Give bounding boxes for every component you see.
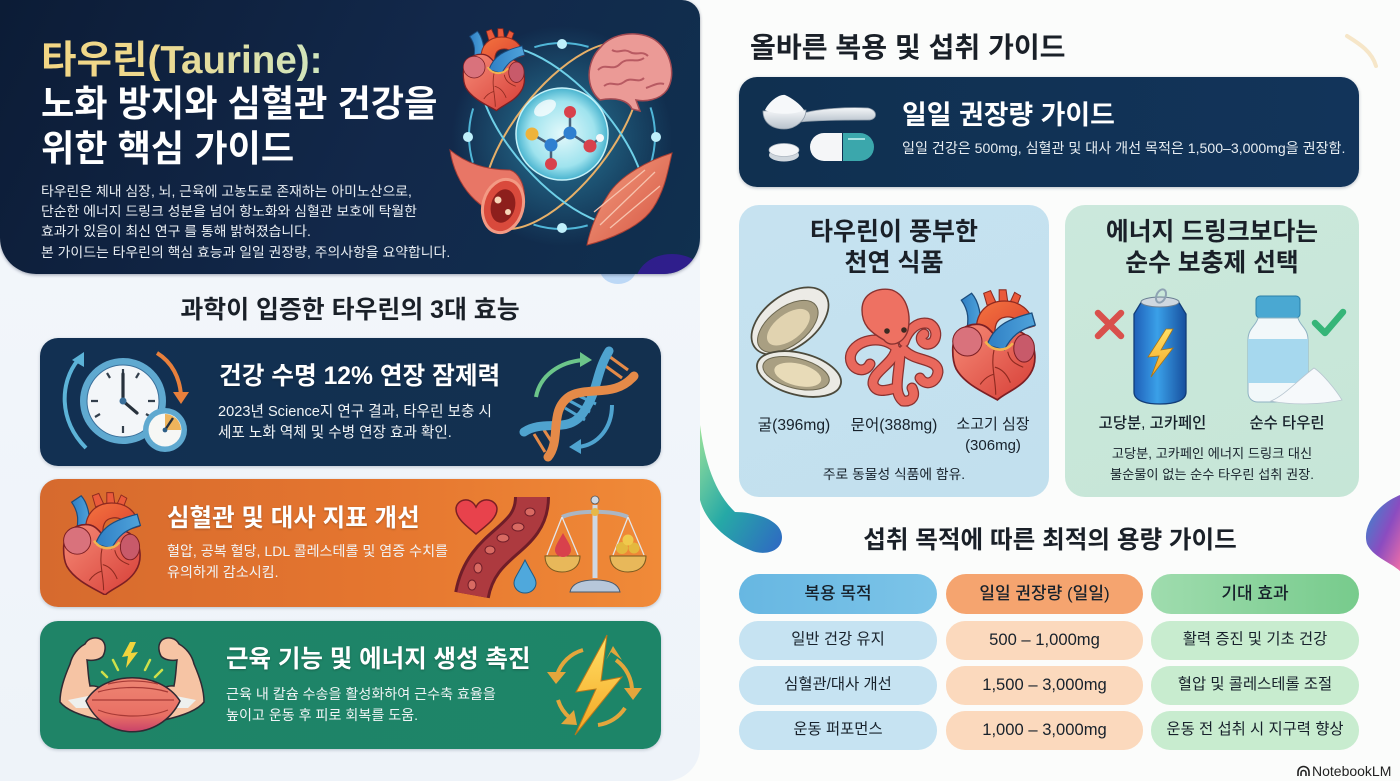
panel heading	[1106, 218, 1318, 277]
icon: DNA helix	[520, 346, 638, 462]
icon: red cross	[1094, 310, 1124, 340]
panel: natural foods	[739, 205, 1049, 497]
icon: vessel, heart, drop and scales	[454, 496, 646, 598]
icon: clock with arrows	[62, 351, 189, 452]
dose: general health: 500 – 1,000mg	[989, 630, 1100, 649]
icon: octopus	[844, 288, 944, 407]
effect: general health	[1151, 621, 1359, 660]
row: exercise: 운동 퍼포먼스	[793, 721, 883, 738]
card description	[167, 543, 448, 580]
dose: general health	[946, 621, 1143, 660]
row: cardiovascular	[739, 666, 937, 705]
icon: oysters	[750, 286, 842, 398]
icon: notebook arcs	[1297, 766, 1310, 776]
blob: hero corner	[636, 254, 708, 310]
label: beef heart: (306mg)	[965, 436, 1021, 454]
effect: general health: 활력 증진 및 기초 건강	[1183, 631, 1327, 648]
card description: 높이고 운동 후 피로 회복를 도움.	[226, 706, 418, 722]
card title: 심혈관 및 대사 지표 개선	[167, 505, 420, 532]
label: beef heart: 소고기 심장	[956, 416, 1030, 433]
effect: exercise	[1151, 711, 1359, 750]
card title: 근육 기능 및 에너지 생성 촉진	[226, 646, 531, 673]
title: 타우린(Taurine):	[41, 39, 322, 82]
panel: daily dose	[739, 77, 1359, 187]
title: 노화 방지와 심혈관 건강을	[41, 83, 437, 124]
dose: exercise	[946, 711, 1143, 750]
recommendation note	[1110, 446, 1314, 482]
column header: daily dose: 일일 권장량 (일일)	[979, 584, 1110, 603]
icon: lightning bolt cycle	[547, 634, 642, 736]
blob: teal decoration	[700, 426, 782, 553]
card description: 유의하게 감소시킴.	[167, 564, 279, 580]
dose: exercise: 1,000 – 3,000mg	[982, 720, 1107, 739]
icon: pure taurine bottle	[1248, 296, 1342, 404]
card description	[226, 686, 496, 722]
icon: beef heart	[952, 289, 1036, 401]
icon: energy drink can	[1133, 288, 1187, 405]
label: beef heart	[956, 416, 1030, 454]
panel: longevity card	[40, 338, 661, 466]
label: pure taurine: 순수 타우린	[1249, 415, 1325, 432]
card description: 근육 내 칼슘 수송을 활성화하여 근수축 효율을	[226, 686, 496, 702]
icon: flexed arms with muscle	[59, 637, 205, 732]
card description: 세포 노화 역체 및 수병 연장 효과 확인.	[218, 424, 452, 440]
panel: hero header	[0, 0, 700, 274]
intro text: 효과가 있음이 최신 연구 를 통해 밝혀졌습니다.	[41, 223, 311, 239]
blob: pale blue under hero	[600, 255, 636, 284]
column header: daily dose	[946, 574, 1143, 614]
title: 위한 핵심 가이드	[41, 128, 294, 169]
panel heading	[810, 218, 978, 277]
intro text	[41, 183, 450, 260]
label: octopus: 문어(388mg)	[851, 417, 937, 434]
intro text: 본 가이드는 타우린의 핵심 효능과 일일 권장량, 주의사항을 요약합니다.	[41, 244, 450, 260]
recommendation note: 불순물이 없는 순수 타우린 섭취 권장.	[1110, 467, 1314, 482]
dose: cardiovascular: 1,500 – 3,000mg	[982, 675, 1107, 694]
table: dosage by goal	[739, 574, 1359, 750]
panel heading: 에너지 드링크보다는	[1106, 219, 1318, 246]
heading: correct dosage: 올바른 복용 및 섭취 가이드	[750, 32, 1066, 63]
heading: dosage table: 섭취 목적에 따른 최적의 용량 가이드	[863, 527, 1237, 554]
panel heading: 타우린이 풍부한	[810, 218, 978, 246]
icon: spoon and capsules	[762, 94, 876, 162]
icon: green check	[1312, 308, 1346, 336]
row: exercise	[739, 711, 937, 750]
label: energy drink: 고당분, 고카페인	[1099, 415, 1206, 432]
intro text: 단순한 에너지 드링크 성분을 넘어 항노화와 심혈관 보호에 탁월한	[41, 203, 417, 219]
note: 주로 동물성 식품에 함유.	[823, 467, 965, 482]
illustration: taurine molecule and organs	[449, 28, 673, 246]
label: oyster: 굴(396mg)	[758, 417, 830, 434]
daily dose description: 일일 건강은 500mg, 심혈관 및 대사 개선 목적은 1,500–3,000mg을 권장함.	[902, 140, 1345, 156]
recommendation note: 고당분, 고카페인 에너지 드링크 대신	[1112, 446, 1312, 461]
icon: heart	[62, 492, 142, 595]
column header: purpose: 복용 목적	[804, 584, 872, 603]
title	[41, 39, 437, 169]
heading: three benefits: 과학이 입증한 타우린의 3대 효능	[180, 296, 520, 324]
row: general health: 일반 건강 유지	[791, 631, 885, 648]
card title: 건강 수명 12% 연장 잠제력	[219, 363, 500, 390]
card description: 2023년 Science지 연구 결과, 타우린 보충 시	[218, 404, 492, 420]
card description: 혈압, 공복 혈당, LDL 콜레스테롤 및 염증 수치를	[167, 543, 448, 559]
column header: purpose	[739, 574, 937, 614]
panel heading: 천연 식품	[845, 249, 943, 277]
row: cardiovascular: 심혈관/대사 개선	[784, 676, 892, 693]
row: general health	[739, 621, 937, 660]
column header: effect: 기대 효과	[1221, 584, 1289, 603]
blob: peach decoration	[1345, 34, 1378, 68]
left background panel	[0, 0, 700, 781]
blob: purple decoration	[1366, 495, 1400, 571]
card description	[218, 404, 492, 440]
column header: effect	[1151, 574, 1359, 614]
panel heading: 순수 보충제 선택	[1125, 250, 1299, 277]
effect: cardiovascular	[1151, 666, 1359, 705]
panel: pure supplement	[1065, 205, 1359, 497]
panel: cardiovascular card	[40, 479, 661, 607]
intro text: 타우린은 체내 심장, 뇌, 근육에 고농도로 존재하는 아미노산으로,	[41, 183, 412, 199]
effect: exercise: 운동 전 섭취 시 지구력 향상	[1166, 721, 1344, 738]
effect: cardiovascular: 혈압 및 콜레스테롤 조절	[1178, 676, 1332, 693]
panel: muscle card	[40, 621, 661, 749]
dose: cardiovascular	[946, 666, 1143, 705]
watermark: NotebookLM: NotebookLM	[1312, 763, 1391, 779]
daily dose title: 일일 권장량 가이드	[902, 100, 1115, 130]
